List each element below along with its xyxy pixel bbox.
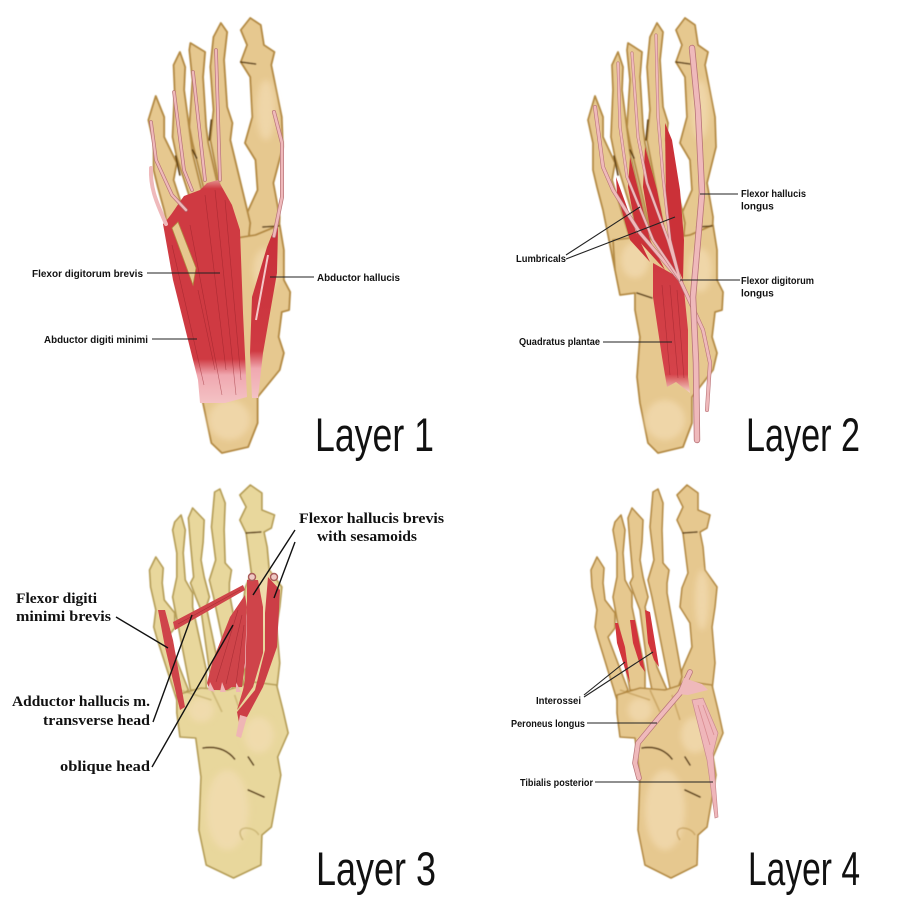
muscle: flexor digiti minimi brevis bbox=[158, 610, 185, 710]
label: Adductor hallucis m. transverse head: Adductor hallucis m. bbox=[12, 694, 150, 710]
label: Quadratus plantae: Quadratus plantae bbox=[519, 337, 600, 348]
icon: foot bones, layer 2 bbox=[588, 18, 723, 453]
muscle: abductor hallucis bbox=[250, 112, 282, 398]
label: Flexor digitorum longus: Flexor digitorum bbox=[741, 276, 814, 287]
panel: layer 3 bbox=[12, 485, 444, 895]
tendon: flexor digitorum longus and flexor hallucis longus bbox=[595, 35, 710, 440]
label: Lumbricals: Lumbricals bbox=[516, 254, 566, 265]
leader lines, layer 4 bbox=[584, 652, 713, 782]
label: Flexor digitorum brevis: Flexor digitorum brevis bbox=[32, 269, 143, 280]
panel: layer 1 bbox=[32, 18, 434, 461]
muscle: flexor hallucis brevis with sesamoids bbox=[236, 574, 280, 738]
panel: layer 4 bbox=[511, 485, 860, 895]
title: Layer 3: Layer 3 bbox=[316, 842, 436, 895]
title: Layer 2: Layer 2 bbox=[746, 408, 860, 461]
muscle: interossei bbox=[615, 610, 659, 683]
muscle: lumbricals bbox=[616, 123, 684, 280]
label: Flexor hallucis longus: Flexor hallucis bbox=[741, 189, 806, 200]
icon: foot bones, layer 1 bbox=[148, 18, 290, 453]
tendon: tibialis posterior bbox=[692, 698, 718, 818]
leader lines, layer 2 bbox=[566, 194, 740, 342]
tendon: peroneus longus bbox=[635, 672, 708, 778]
tendons: flexor digitorum brevis to toes bbox=[151, 50, 220, 210]
label: Abductor digiti minimi: Abductor digiti minimi bbox=[44, 335, 148, 346]
muscle: adductor hallucis transverse head bbox=[173, 585, 245, 630]
label: Abductor hallucis: Abductor hallucis bbox=[317, 273, 400, 284]
leader lines, layer 1 bbox=[147, 273, 314, 339]
label: Flexor digiti minimi brevis: minimi brevis bbox=[16, 609, 111, 625]
label: Flexor digiti minimi brevis: Flexor digiti bbox=[16, 591, 97, 607]
label: oblique head: oblique head bbox=[60, 759, 151, 775]
label: Interossei: Interossei bbox=[536, 696, 581, 707]
icon: foot bones, layer 4 bbox=[591, 485, 723, 878]
label: Peroneus longus: Peroneus longus bbox=[511, 719, 585, 730]
icon: foot bones, layer 3 bbox=[150, 485, 288, 878]
muscle: quadratus plantae bbox=[653, 263, 690, 393]
label: Flexor hallucis brevis with sesamoids: with sesamoids bbox=[317, 529, 417, 545]
panel: layer 2 bbox=[516, 18, 860, 461]
title: Layer 1: Layer 1 bbox=[315, 408, 434, 461]
label: Adductor hallucis m. transverse head: transverse head bbox=[43, 713, 151, 729]
label: Tibialis posterior: Tibialis posterior bbox=[520, 778, 593, 789]
icon: sesamoids bbox=[248, 574, 278, 580]
muscle: adductor hallucis oblique head bbox=[207, 595, 247, 692]
leader lines, layer 3 bbox=[116, 530, 295, 767]
muscle: abductor digiti minimi and flexor digitorum brevis bbox=[151, 168, 247, 403]
label: Flexor hallucis longus: longus bbox=[741, 202, 774, 212]
label: Flexor digitorum longus: longus bbox=[741, 288, 774, 300]
label: Flexor hallucis brevis with sesamoids: Flexor hallucis brevis bbox=[299, 511, 444, 527]
